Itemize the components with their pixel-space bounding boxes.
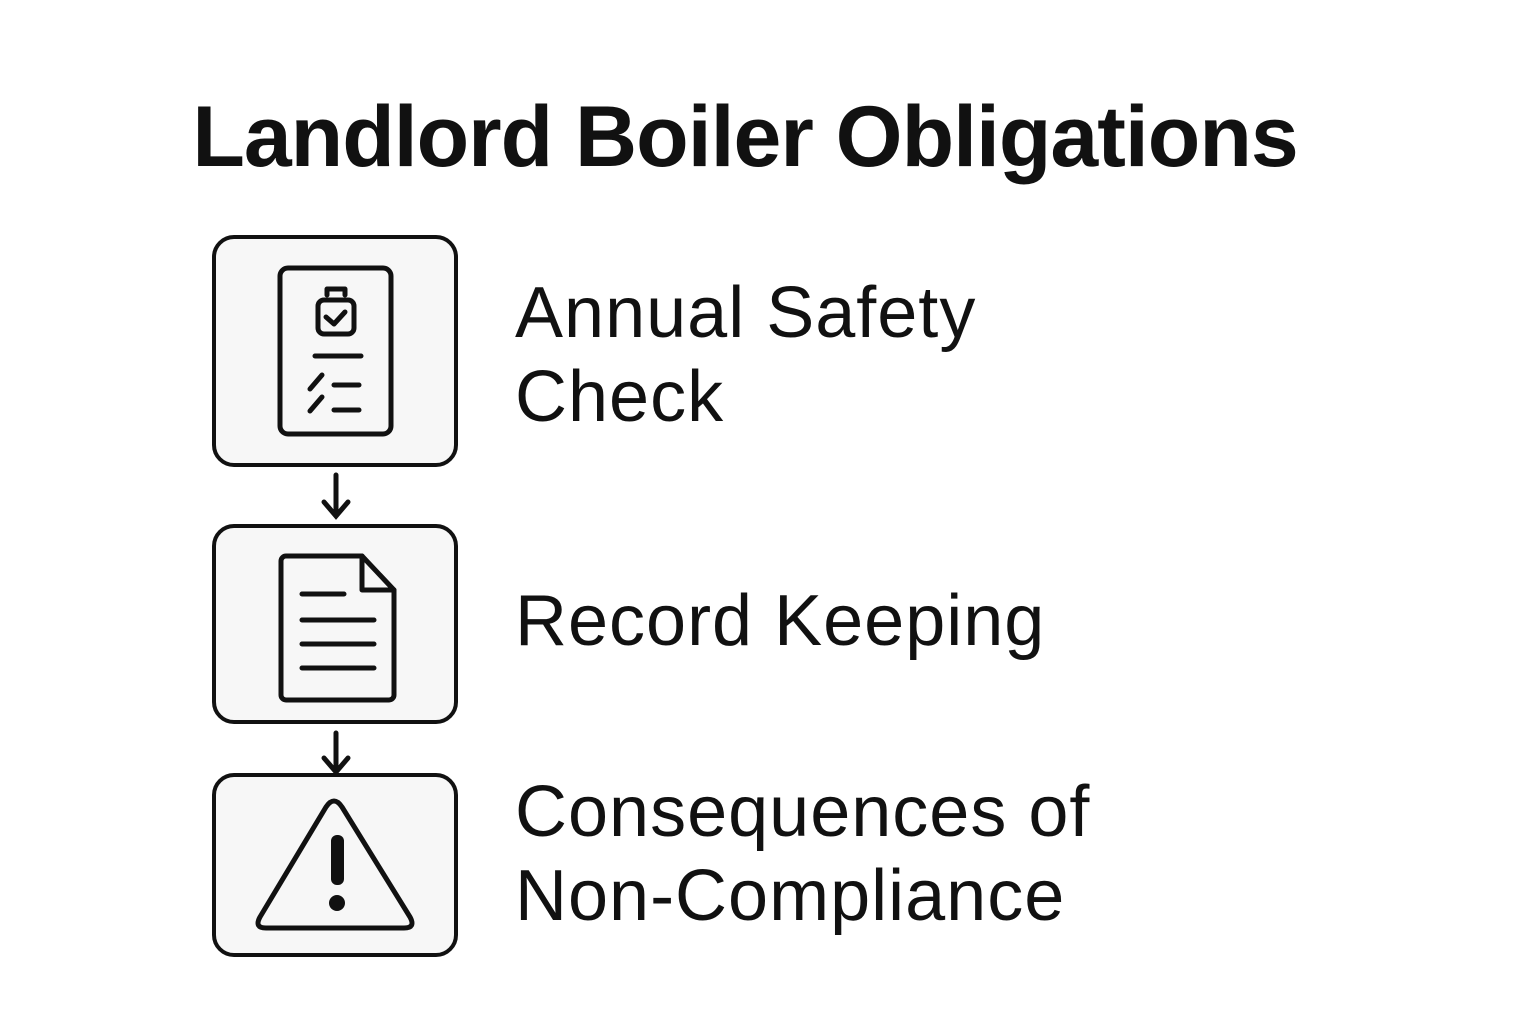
label: consequences: Non-Compliance	[515, 856, 1065, 936]
label: record keeping: Record Keeping	[515, 581, 1045, 661]
arrow 2	[322, 730, 350, 773]
label: annual safety check: Check	[515, 357, 724, 437]
title: Landlord Boiler Obligations	[192, 89, 1298, 185]
step 3 box: warning icon	[212, 773, 458, 957]
label: consequences: Consequences of	[515, 772, 1090, 852]
step 2 box: record keeping icon	[212, 524, 458, 724]
label: annual safety check	[515, 273, 976, 437]
arrow 1	[322, 472, 350, 520]
label: consequences	[515, 772, 1090, 936]
step 1 box: annual safety check icon	[212, 235, 458, 467]
label: annual safety check: Annual Safety	[515, 273, 976, 353]
